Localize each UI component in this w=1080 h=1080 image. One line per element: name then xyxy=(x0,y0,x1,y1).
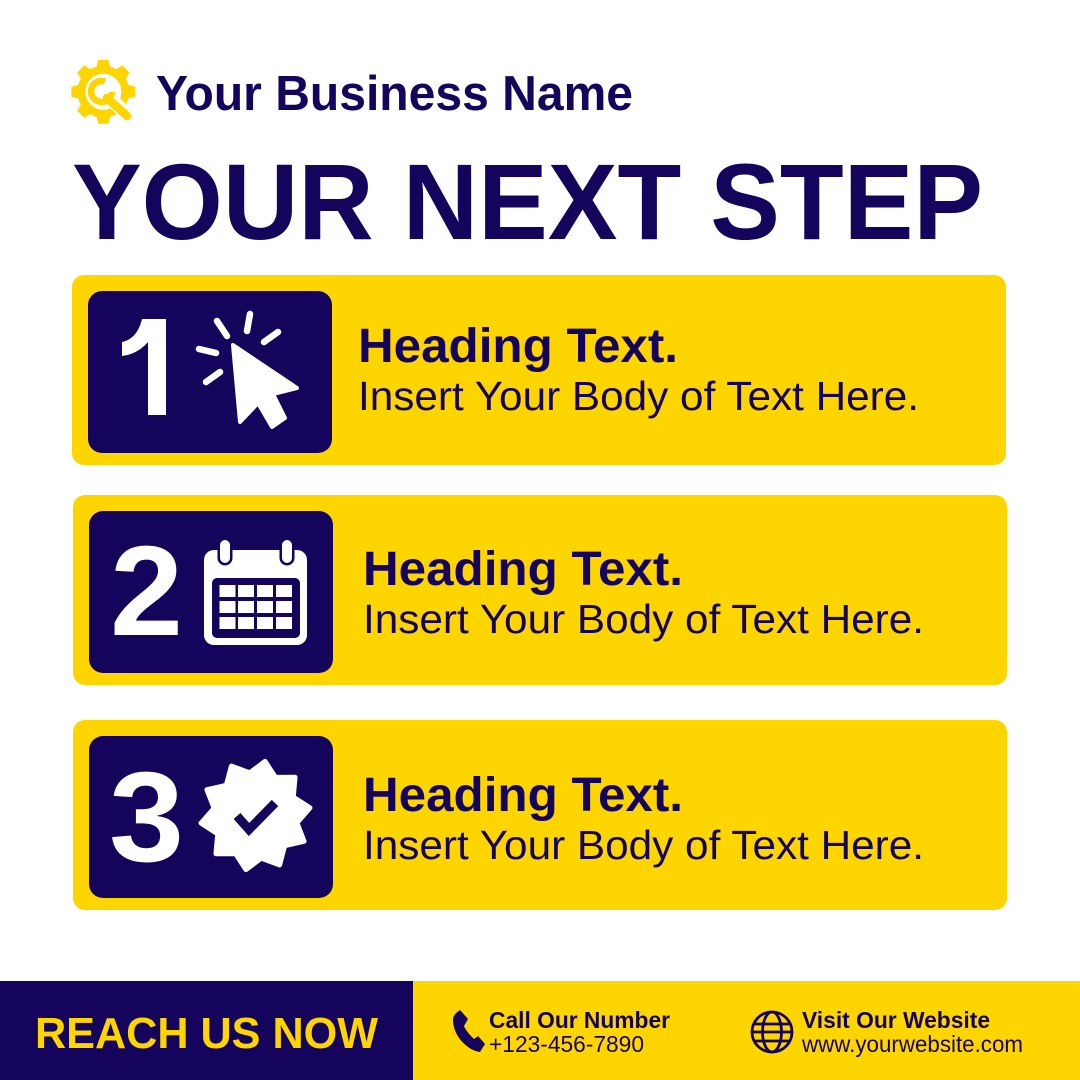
number tile 1 xyxy=(88,291,332,453)
step 3 heading: Heading Text. xyxy=(363,769,683,822)
icon: globe xyxy=(752,1012,792,1052)
phone label: Call Our Number xyxy=(489,1007,670,1033)
phone number: +123-456-7890 xyxy=(489,1031,644,1057)
panel: step 1 xyxy=(72,275,1006,465)
number 2: 2 xyxy=(110,520,183,663)
number 1: 1 xyxy=(119,300,190,443)
contact: website xyxy=(752,1007,1023,1057)
header: logo and business name xyxy=(58,46,633,137)
panel: step 3 xyxy=(73,720,1007,910)
number 3: 3 xyxy=(109,746,184,889)
title: YOUR NEXT STEP xyxy=(72,141,983,262)
step 1 body: Insert Your Body of Text Here. xyxy=(358,373,919,419)
step 3 body: Insert Your Body of Text Here. xyxy=(363,822,924,868)
number tile 2 xyxy=(89,511,333,673)
website label: Visit Our Website xyxy=(802,1007,990,1033)
step 1 heading: Heading Text. xyxy=(358,320,678,373)
call to action block xyxy=(0,981,413,1080)
number tile 3 xyxy=(89,736,333,898)
icon: phone handset xyxy=(453,1010,485,1052)
icon: verified badge with check xyxy=(194,752,317,879)
call to action text: REACH US NOW xyxy=(35,1009,378,1058)
step 2 heading: Heading Text. xyxy=(363,543,683,596)
contact: phone xyxy=(453,1007,670,1057)
icon: calendar xyxy=(204,540,307,645)
panel: step 2 xyxy=(73,495,1007,685)
website url: www.yourwebsite.com xyxy=(801,1031,1023,1057)
icon: mouse cursor click xyxy=(199,314,297,427)
business name: Your Business Name xyxy=(156,67,633,121)
icon: gear and wrench logo xyxy=(58,46,149,137)
number 1 xyxy=(122,319,166,415)
footer band xyxy=(0,981,1080,1080)
step 2 body: Insert Your Body of Text Here. xyxy=(363,596,924,642)
